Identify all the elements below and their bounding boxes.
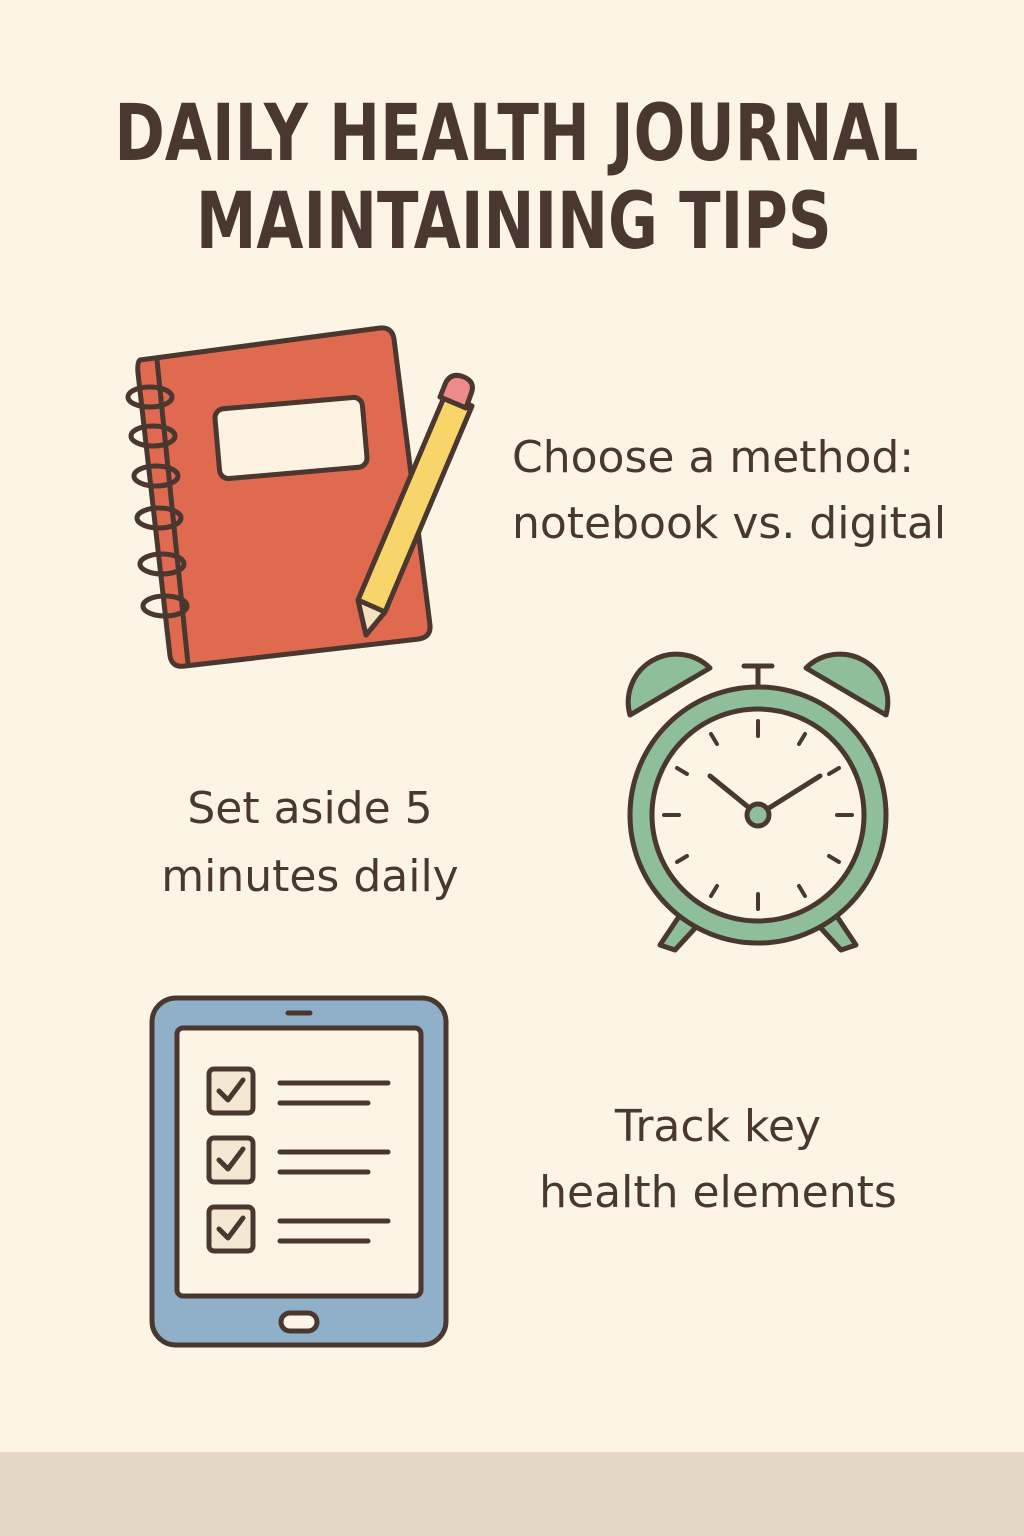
icon: tablet checklist	[150, 996, 448, 1348]
title: DAILY HEALTH JOURNAL	[114, 89, 918, 179]
text: choose method: notebook vs. digital	[512, 498, 946, 549]
text: set aside	[161, 783, 459, 902]
text: track key	[539, 1101, 897, 1218]
text: track key: Track key	[615, 1101, 821, 1152]
title: MAINTAINING TIPS	[196, 177, 832, 267]
footer band	[0, 1452, 1024, 1536]
text: set aside: minutes daily	[161, 851, 459, 902]
title	[114, 89, 918, 267]
text: track key: health elements	[539, 1167, 897, 1218]
icon: alarm clock	[626, 652, 890, 952]
text: choose method	[512, 432, 946, 549]
icon: notebook and pencil	[126, 325, 475, 669]
text: set aside: Set aside 5	[187, 783, 433, 834]
text: choose method: Choose a method:	[512, 432, 914, 483]
